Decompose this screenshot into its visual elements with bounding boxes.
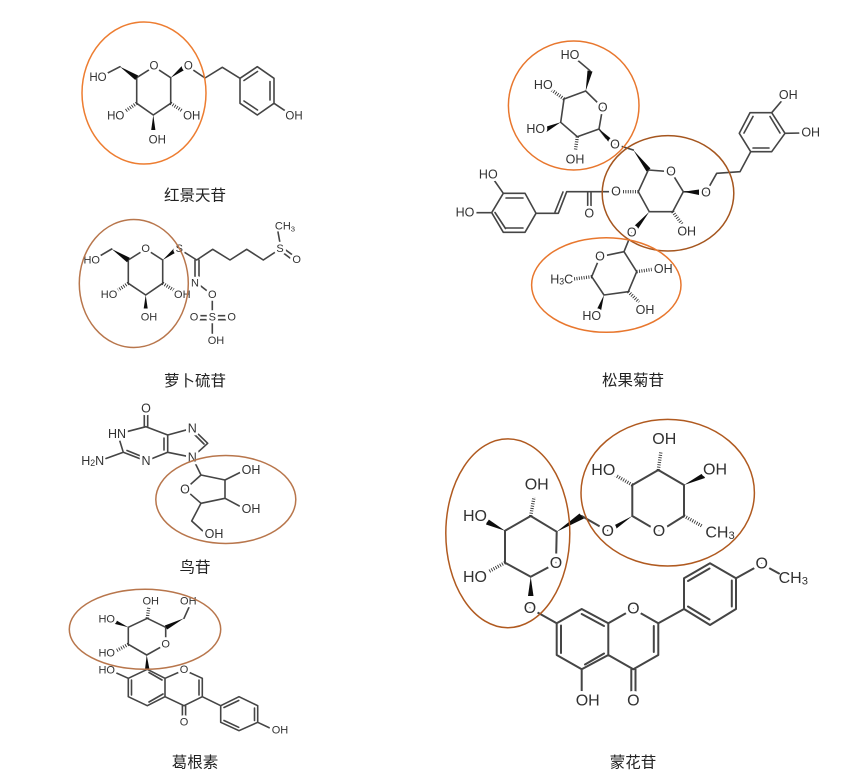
structure: puerarin molecule: HO <box>98 613 115 625</box>
structure: glucoraphanin molecule: S <box>209 312 216 324</box>
structure: glucoraphanin molecule <box>83 221 301 347</box>
structure: glucoraphanin molecule: O <box>141 243 150 255</box>
structure: glucoraphanin molecule: CH <box>275 221 291 233</box>
structure: linarin molecule: OH <box>703 462 727 478</box>
structure: salidroside molecule: OH <box>183 111 200 123</box>
structure: linarin molecule: CH <box>779 570 802 587</box>
structure: linarin molecule: HO <box>463 569 487 586</box>
structure: guanosine molecule: OH <box>205 527 223 541</box>
structure: guanosine molecule: 2 <box>90 458 95 468</box>
structure: echinacoside molecule: HO <box>582 309 601 323</box>
structure: glucoraphanin molecule: O <box>227 312 236 324</box>
structure: puerarin molecule: O <box>180 664 189 676</box>
structure: echinacoside molecule: C <box>564 272 573 286</box>
structure: puerarin molecule: HO <box>98 647 115 659</box>
structure: puerarin molecule: O <box>161 638 170 650</box>
label: 萝卜硫苷 <box>164 372 226 390</box>
structure: glucoraphanin molecule: N <box>191 277 199 289</box>
structure: guanosine molecule: H <box>81 454 90 468</box>
top sugar highlight circle <box>508 41 639 170</box>
label: 红景天苷 <box>164 186 226 204</box>
structure: salidroside molecule: HO <box>107 111 124 123</box>
structure: echinacoside molecule: HO <box>526 122 545 136</box>
structure: glucoraphanin molecule: O <box>292 254 301 266</box>
structure: linarin molecule: OH <box>652 431 676 448</box>
structure: puerarin molecule: OH <box>272 725 288 737</box>
structure: echinacoside molecule: OH <box>677 225 696 239</box>
structure: linarin molecule: O <box>755 556 768 572</box>
structure: linarin molecule: O <box>627 600 640 618</box>
structure: echinacoside molecule: 3 <box>559 276 564 286</box>
structure: linarin molecule: O <box>524 600 536 617</box>
panel: guanosine <box>81 401 296 576</box>
label: 鸟苷 <box>179 558 211 576</box>
structure: echinacoside molecule: OH <box>779 88 798 102</box>
structure: glucoraphanin molecule: OH <box>174 289 191 301</box>
structure: puerarin molecule: OH <box>180 596 197 608</box>
structure: echinacoside molecule: O <box>627 226 637 240</box>
structure: guanosine molecule: OH <box>242 463 260 477</box>
label: 葛根素 <box>172 754 218 771</box>
structure: salidroside molecule: OH <box>149 135 166 147</box>
structure: guanosine molecule <box>81 401 260 541</box>
structure: linarin molecule: O <box>601 523 614 540</box>
structure: echinacoside molecule <box>456 48 820 323</box>
structure: linarin molecule: CH <box>705 524 728 542</box>
structure: glucoraphanin molecule: HO <box>83 255 100 267</box>
structure: linarin molecule: 3 <box>728 530 735 542</box>
structure: glucoraphanin molecule: O <box>190 312 199 324</box>
label: 蒙花苷 <box>610 754 656 771</box>
structure: puerarin molecule <box>98 596 288 737</box>
structure: linarin molecule <box>463 431 808 710</box>
structure: linarin molecule: HO <box>591 462 615 479</box>
structure: linarin molecule: O <box>653 523 665 540</box>
structure: echinacoside molecule: HO <box>456 206 475 220</box>
structure: salidroside molecule: O <box>150 61 159 73</box>
structure: echinacoside molecule: OH <box>566 152 584 166</box>
structure: guanosine molecule: OH <box>242 502 260 516</box>
structure: glucoraphanin molecule: HO <box>101 289 118 301</box>
structure: linarin molecule: OH <box>576 692 600 710</box>
left sugar highlight ellipse <box>446 439 570 628</box>
middle sugar highlight ellipse <box>602 136 734 251</box>
sugar highlight ellipse <box>156 456 296 544</box>
structure: echinacoside molecule: O <box>610 137 620 151</box>
structure: linarin molecule: O <box>550 555 562 572</box>
structure: echinacoside molecule: HO <box>479 167 498 181</box>
structure: linarin molecule: 3 <box>802 575 808 587</box>
structure: echinacoside molecule: OH <box>654 262 673 276</box>
sugar highlight ellipse <box>79 220 188 348</box>
structure: glucoraphanin molecule: O <box>208 289 217 301</box>
structure: guanosine molecule: HN <box>108 427 126 441</box>
structure: guanosine molecule: N <box>95 454 104 468</box>
panel: puerarin <box>69 589 288 771</box>
structure: echinacoside molecule: O <box>598 101 608 115</box>
structure: salidroside molecule: OH <box>285 111 303 123</box>
structure: linarin molecule: HO <box>463 508 487 525</box>
structure: guanosine molecule: N <box>188 421 197 435</box>
structure: echinacoside molecule: OH <box>801 125 820 139</box>
right sugar highlight ellipse <box>581 419 754 566</box>
structure: glucoraphanin molecule: OH <box>208 335 224 347</box>
panel: echinacoside <box>456 41 820 390</box>
structure: salidroside molecule: O <box>184 61 193 73</box>
structure: echinacoside molecule: OH <box>636 303 654 317</box>
panel: salidroside <box>82 22 303 204</box>
structure: salidroside molecule: HO <box>89 72 107 84</box>
structure: echinacoside molecule: O <box>666 165 676 179</box>
structure: guanosine molecule: N <box>188 450 197 464</box>
panel: glucoraphanin <box>79 220 301 390</box>
label: 松果菊苷 <box>602 372 664 390</box>
structure: echinacoside molecule: O <box>584 206 594 220</box>
bottom sugar highlight ellipse <box>532 238 681 332</box>
structure: salidroside molecule <box>89 61 303 147</box>
structure: puerarin molecule: O <box>180 716 189 728</box>
structure: echinacoside molecule: HO <box>534 78 553 92</box>
structure: echinacoside molecule: O <box>595 250 605 264</box>
structure: echinacoside molecule: O <box>701 185 711 199</box>
structure: linarin molecule: OH <box>525 476 549 494</box>
structure: guanosine molecule: O <box>180 482 190 496</box>
structure: echinacoside molecule: H <box>550 272 559 286</box>
structure: glucoraphanin molecule: OH <box>141 311 157 323</box>
structure: glucoraphanin molecule: S <box>176 243 183 255</box>
structure: echinacoside molecule: O <box>611 185 621 199</box>
structure: guanosine molecule: N <box>141 454 151 468</box>
sugar highlight ellipse <box>69 589 221 669</box>
panel: linarin <box>446 419 808 771</box>
structure: glucoraphanin molecule: S <box>276 243 284 255</box>
sugar highlight ellipse <box>82 22 206 164</box>
structure: linarin molecule: O <box>627 692 640 710</box>
structure: echinacoside molecule: HO <box>561 48 580 62</box>
structure: guanosine molecule: O <box>141 401 151 415</box>
structure: puerarin molecule: OH <box>142 596 159 608</box>
structure: puerarin molecule: HO <box>98 665 115 677</box>
structure: glucoraphanin molecule: 3 <box>291 224 295 233</box>
